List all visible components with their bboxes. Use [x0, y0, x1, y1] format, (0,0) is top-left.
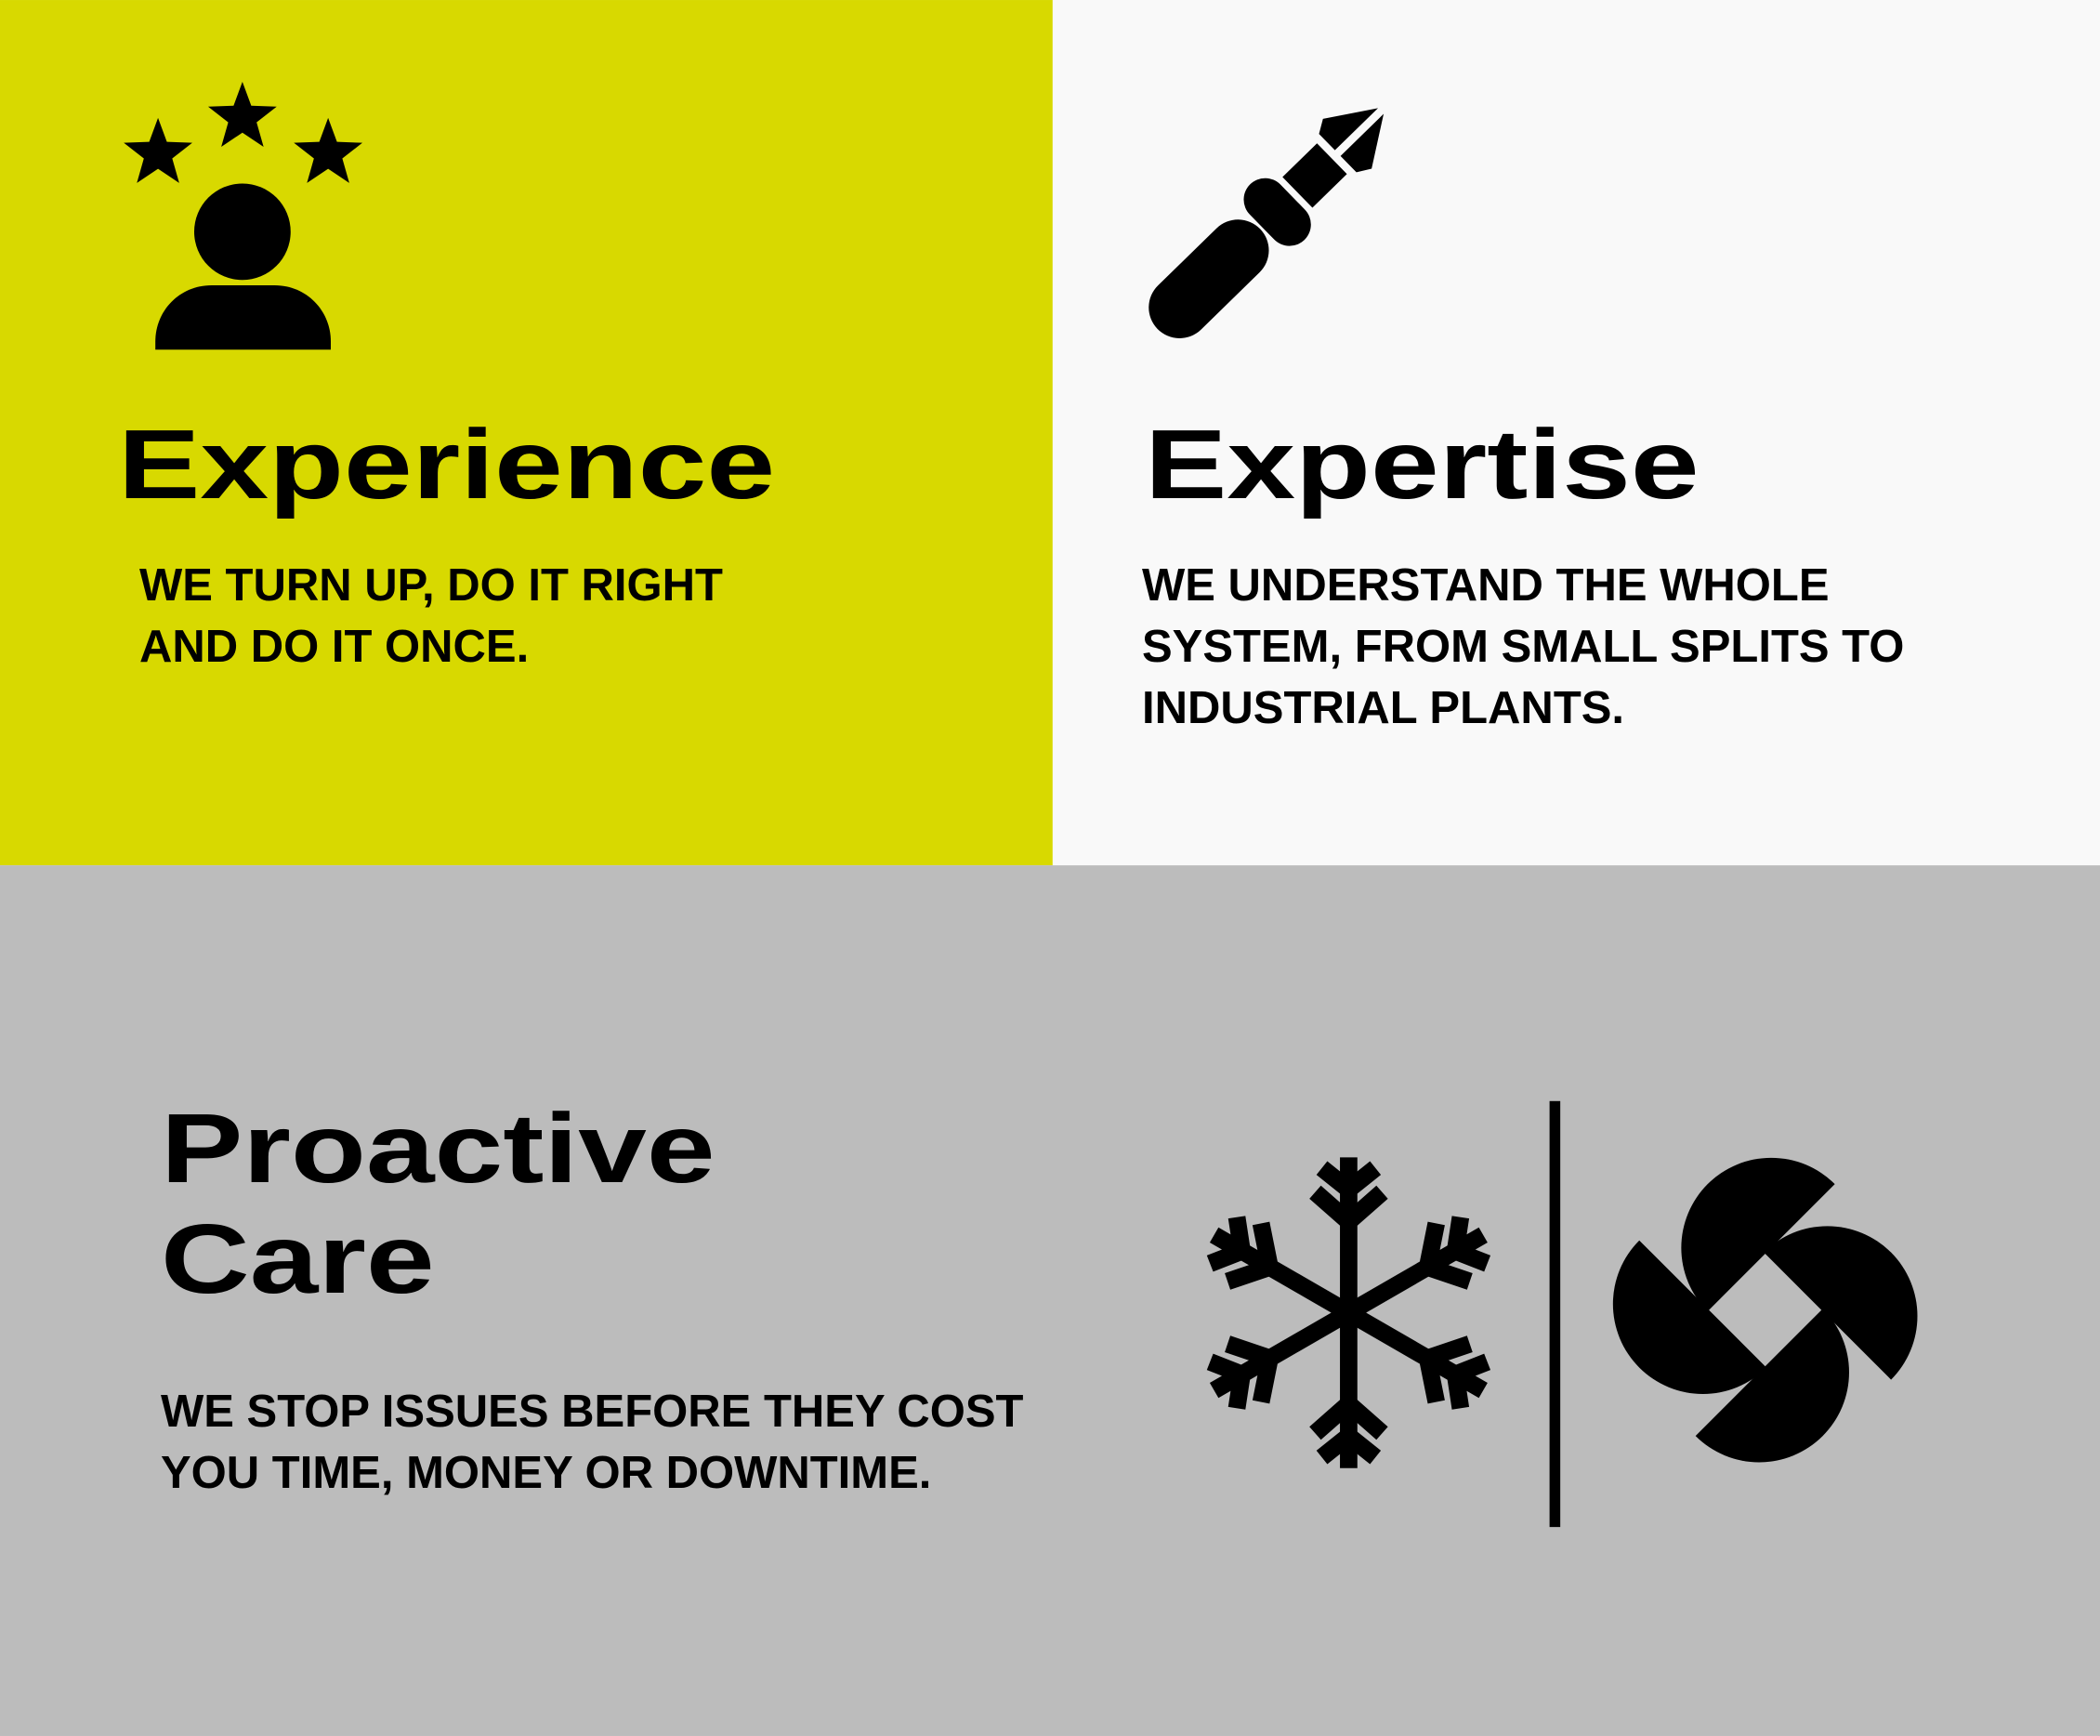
- heading: Proactive Care: [161, 1094, 715, 1314]
- heading: Proactive Care: Proactive: [161, 1094, 715, 1203]
- heading: Proactive Care: Care: [161, 1204, 435, 1314]
- text: proactive body: YOU TIME, MONEY OR DOWNTIME.: [161, 1448, 931, 1498]
- text: experience body: AND DO IT ONCE.: [139, 622, 529, 672]
- heading: Experience: Experience: [118, 410, 775, 519]
- heading: Expertise: Expertise: [1145, 410, 1700, 519]
- text: expertise body: WE UNDERSTAND THE WHOLE: [1142, 560, 1829, 611]
- text: proactive body: WE STOP ISSUES BEFORE THEY COST: [161, 1387, 1023, 1437]
- icon: person with stars: [124, 82, 362, 349]
- icon: fountain pen: [1131, 84, 1408, 357]
- divider line: [1550, 1101, 1560, 1527]
- text: expertise body: INDUSTRIAL PLANTS.: [1142, 683, 1624, 733]
- text: experience body: WE TURN UP, DO IT RIGHT: [139, 560, 723, 611]
- icon: snowflake: [1198, 1157, 1500, 1468]
- text: expertise body: [1142, 560, 1904, 733]
- icon: pinwheel: [1613, 1158, 1917, 1462]
- text: proactive body: [161, 1387, 1023, 1498]
- text: experience body: [139, 560, 723, 672]
- text: expertise body: SYSTEM, FROM SMALL SPLITS TO: [1142, 622, 1904, 672]
